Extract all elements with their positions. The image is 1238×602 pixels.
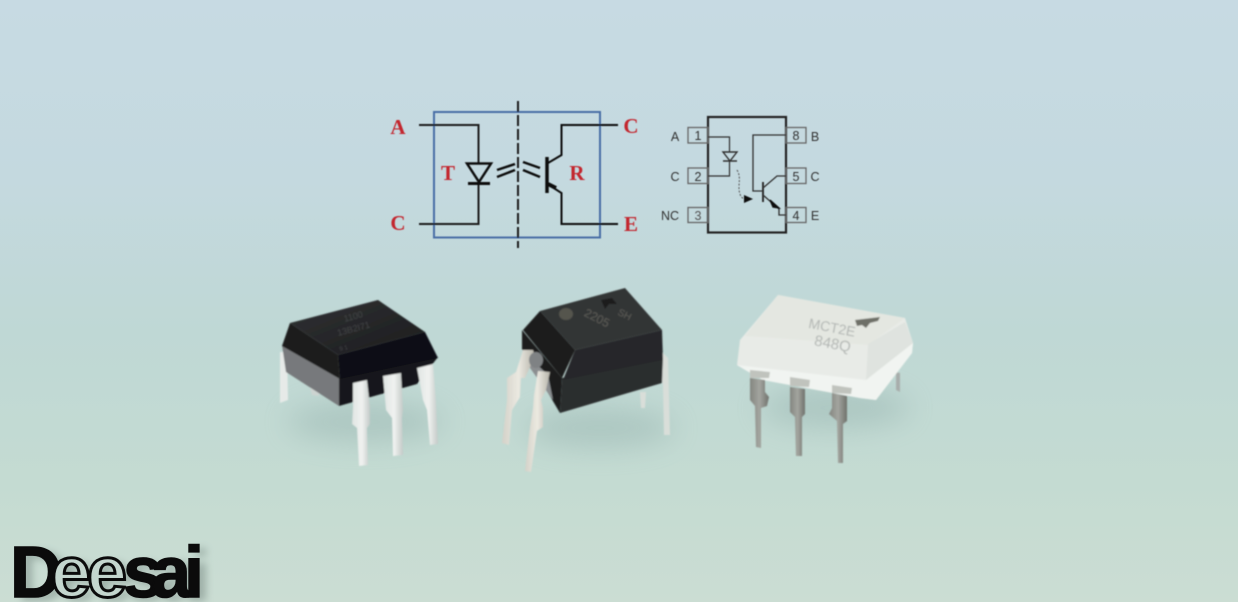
end notch [529,352,543,368]
chip marking [804,315,857,356]
LED symbol [467,164,491,185]
internal light arrow [737,170,753,203]
faint chip marking: 13B2I71 [336,320,371,338]
faint chip marking: 1100 [343,309,364,324]
pin numbers and names: 3 [695,209,702,223]
white DIP chip, right [737,295,913,463]
back pins [640,352,670,435]
pin numbers and names: E [811,209,819,223]
front pins [502,350,550,472]
chip marking [582,306,633,330]
internal phototransistor [753,135,786,215]
pin numbers and names: C [810,170,820,184]
pin numbers and names: C [670,170,680,184]
chip shadows [287,388,910,448]
light rays [497,162,540,177]
chip body [708,117,786,232]
pin numbers and names: 8 [793,129,800,143]
phototransistor symbol [547,125,618,224]
pin numbers and names: 1 [695,129,702,143]
pin numbers and names [661,129,820,223]
package outline [434,112,600,238]
chip logo mark [601,298,617,309]
pin and side labels [390,114,639,236]
pin numbers and names: 2 [695,170,702,184]
chip marking: 848Q [813,332,852,356]
internal LED [708,137,737,176]
pin numbers and names: 5 [793,170,800,184]
back pin [896,372,900,392]
chip marking: 2205 [582,306,612,330]
pin numbers and names: 4 [793,209,800,223]
IC pinout diagram [661,117,820,232]
chip marking: SH [616,307,633,323]
upper body [282,300,438,379]
pin numbers and names: NC [661,209,679,223]
pin and side labels: C [390,211,406,235]
metal pins [750,370,852,463]
pin numbers and names: A [671,130,680,144]
lower body [282,345,438,406]
back pins [280,352,320,403]
LED circuit wires [419,125,478,224]
optocoupler schematic diagram [390,101,639,248]
body [737,295,913,400]
body [522,288,663,413]
chip logo dot [559,308,573,320]
faint chip marking: 9 1 [339,345,349,353]
chip marking: MCT2E [807,315,857,340]
Deesai logo [10,533,211,602]
black DIP chip, centre [502,288,670,472]
pin numbers and names: B [811,130,819,144]
faint chip marking [331,308,375,353]
pin and side labels: A [390,115,406,139]
pin boxes [688,128,806,222]
chip logo [855,317,880,328]
front pins [352,364,438,466]
pin and side labels: E [624,212,638,236]
isolation barrier line [517,101,519,248]
pin and side labels: T [441,161,455,185]
pin and side labels: R [569,161,585,185]
black DIP chip, left [280,300,438,466]
pin and side labels: C [623,114,639,138]
